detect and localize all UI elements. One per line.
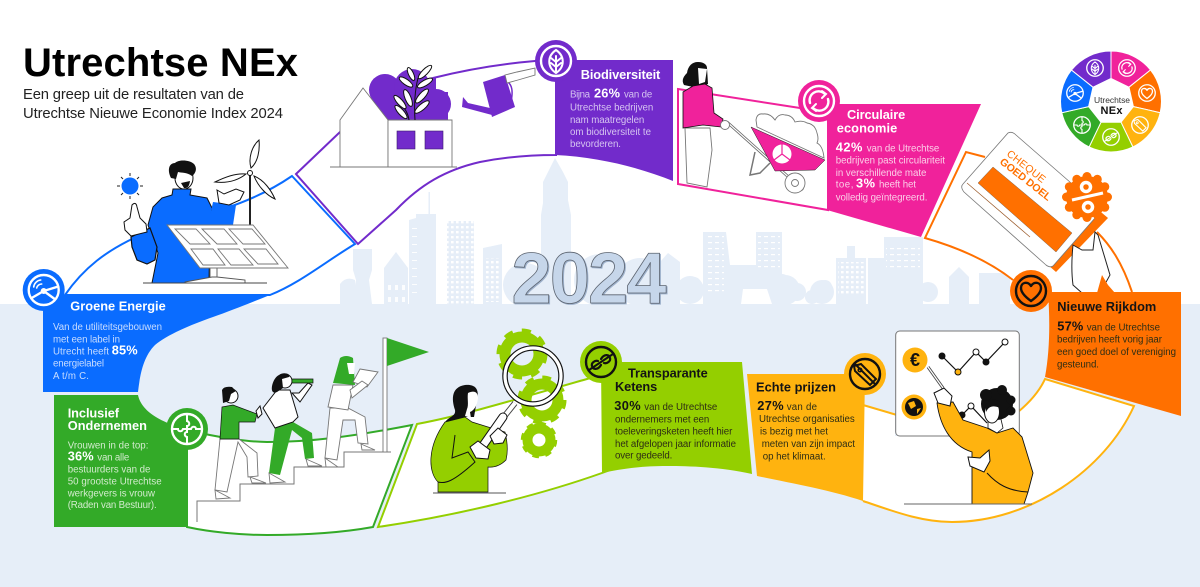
illustration: person presenting on board <box>896 331 1033 504</box>
icon: sun <box>117 173 143 199</box>
icon: wind turbine <box>215 140 275 226</box>
text block: over gedeeld. <box>615 450 672 461</box>
stairs <box>197 452 391 522</box>
text block: 57% <box>1057 319 1084 334</box>
person <box>937 402 1033 504</box>
text block: van de <box>787 402 817 413</box>
text block: van de <box>624 90 652 101</box>
cloud <box>756 114 824 158</box>
person two <box>263 373 322 483</box>
cheque text: CHEQUE <box>1004 148 1048 186</box>
text block: bedrijven heeft vorig jaar <box>1057 335 1163 346</box>
title block <box>23 41 298 122</box>
icon: euro <box>902 348 928 372</box>
text block: 26% <box>594 86 621 101</box>
text block: Utrecht heeft <box>53 346 109 357</box>
band: inclusief ondernemen <box>187 425 412 535</box>
illustration: woman with magnifying glass and gears <box>431 331 564 493</box>
text block: 30% <box>614 398 641 413</box>
text block: volledig geïntegreerd. <box>836 192 927 203</box>
icon: circular arrows <box>798 80 840 122</box>
text block: van de Utrechtse <box>867 144 939 155</box>
illustration: house with plant and watering can <box>330 64 535 167</box>
flag <box>383 338 429 452</box>
heading: economie <box>837 120 897 135</box>
heading: Transparante <box>628 366 708 381</box>
illustration: woman with wheelbarrow <box>683 62 825 193</box>
icon: leaf <box>535 40 577 82</box>
text block: meten van zijn impact <box>762 439 855 450</box>
text block: 85% <box>112 342 138 357</box>
panel: nieuwe rijkdom <box>1010 270 1181 416</box>
text block <box>1057 319 1176 370</box>
board <box>896 331 1019 436</box>
text block: het afgelopen jaar informatie <box>615 439 736 450</box>
house <box>330 88 457 167</box>
subtitle: Utrechtse Nieuwe Economie Index 2024 <box>23 106 283 122</box>
purple bush <box>369 69 451 122</box>
panel: biodiversiteit <box>535 40 673 181</box>
heading <box>615 366 708 394</box>
band: groene energie <box>65 176 355 295</box>
person one <box>215 387 266 499</box>
icon: recycle <box>772 144 792 164</box>
text block: Utrechtse bedrijven <box>570 102 653 113</box>
person three <box>325 356 378 467</box>
text block: met een label in <box>53 334 120 345</box>
heading <box>837 107 905 135</box>
subtitle: Een greep uit de resultaten van de <box>23 87 244 103</box>
icon: euro: € <box>910 350 920 370</box>
text block: heeft het <box>879 180 916 191</box>
heading: Biodiversiteit <box>581 67 661 82</box>
band: transparante ketens <box>378 372 610 527</box>
text block: om biodiversiteit te <box>570 127 651 138</box>
panel: circulaire economie <box>798 80 981 237</box>
text block: in verschillende mate <box>836 168 926 179</box>
heading: Ondernemen <box>68 418 147 433</box>
text block <box>757 398 855 463</box>
icon: percentage badge <box>1062 172 1112 222</box>
text block <box>836 140 945 203</box>
heading: Nieuwe Rijkdom <box>1057 299 1156 314</box>
text block <box>67 440 162 511</box>
icon: Utrechtse NEx wheel <box>1061 51 1161 152</box>
panel: inclusief ondernemen <box>54 395 208 527</box>
panel: echte prijzen <box>747 353 886 501</box>
icon: puzzle <box>166 408 208 450</box>
text block <box>614 398 736 461</box>
band: nieuwe rijkdom <box>925 152 1132 300</box>
cheque text: GOED DOEL <box>997 156 1054 204</box>
text block: van alle <box>97 453 129 464</box>
heading: Ketens <box>615 379 657 394</box>
icon: solar panel <box>167 225 288 283</box>
text block: (Raden van Bestuur). <box>68 500 157 511</box>
text block: een goed doel of vereniging <box>1057 347 1176 358</box>
icon: Utrechtse NEx wheel: Utrechtse <box>1094 95 1130 105</box>
text block: bevorderen. <box>570 139 621 150</box>
wheelbarrow tub <box>751 127 825 171</box>
heading: Echte prijzen <box>756 380 836 395</box>
text block: Utrechtse organisaties <box>759 414 855 425</box>
icon: chain <box>580 341 622 383</box>
icon: wind wheel <box>23 269 65 311</box>
panel: transparante ketens <box>580 341 752 474</box>
text block: van de Utrechtse <box>644 402 717 413</box>
band: echte prijzen <box>863 379 1134 522</box>
subtitle <box>23 87 283 122</box>
illustration: cheque with percentage badge and hand <box>962 132 1115 293</box>
title: Utrechtse NEx <box>23 41 298 85</box>
text block: Bijna <box>570 90 591 101</box>
text block: 3% <box>856 176 876 191</box>
skyline of Utrecht <box>340 158 1010 307</box>
text block: op het klimaat. <box>763 452 826 463</box>
band: biodiversiteit <box>296 60 556 244</box>
icon: hand <box>1072 232 1115 293</box>
heading: Inclusief <box>68 405 120 420</box>
text block <box>570 86 653 150</box>
sweater <box>431 417 507 492</box>
text block: energielabel <box>53 359 104 370</box>
icon: price tag <box>844 353 886 395</box>
gears <box>499 331 564 456</box>
magnifying glass <box>482 348 561 447</box>
text block: A t/m C. <box>53 371 89 382</box>
text block: gesteund. <box>1057 359 1099 370</box>
icon: watering can <box>462 68 535 117</box>
text block <box>53 322 162 382</box>
text block: nam maatregelen <box>570 115 644 126</box>
illustration: people climbing stairs toward flag <box>197 338 429 522</box>
text block: toeleveringsketen heeft hier <box>615 426 733 437</box>
band: circulaire economie <box>678 89 828 210</box>
panel: groene energie <box>23 269 270 392</box>
text block: bestuurders van de <box>68 464 150 475</box>
text block: is bezig met het <box>760 426 828 437</box>
text block: Vrouwen in de top: <box>68 440 148 451</box>
line chart <box>938 339 1008 423</box>
text block: 50 grootste Utrechtse <box>68 477 162 488</box>
text block: van de Utrechtse <box>1087 323 1160 334</box>
text block: werkgevers is vrouw <box>67 489 156 500</box>
text block: toe, <box>836 180 853 191</box>
text block: bedrijven past circulariteit <box>836 155 945 166</box>
plant leaves <box>392 64 434 120</box>
text block: 36% <box>68 449 94 464</box>
text block: Van de utiliteitsgebouwen <box>53 322 162 333</box>
heading: Groene Energie <box>70 299 166 314</box>
text block: 42% <box>836 140 863 155</box>
text block: 27% <box>757 398 784 413</box>
icon: globe <box>902 394 926 420</box>
heading: Circulaire <box>847 107 905 122</box>
text block: ondernemers met een <box>615 414 709 425</box>
icon: Utrechtse NEx wheel: NEx <box>1100 105 1123 117</box>
year 2024: 2024 <box>512 239 666 319</box>
icon: heart <box>1010 270 1052 312</box>
heading <box>68 405 147 433</box>
illustration: man with solar panel and wind turbine <box>117 140 288 283</box>
